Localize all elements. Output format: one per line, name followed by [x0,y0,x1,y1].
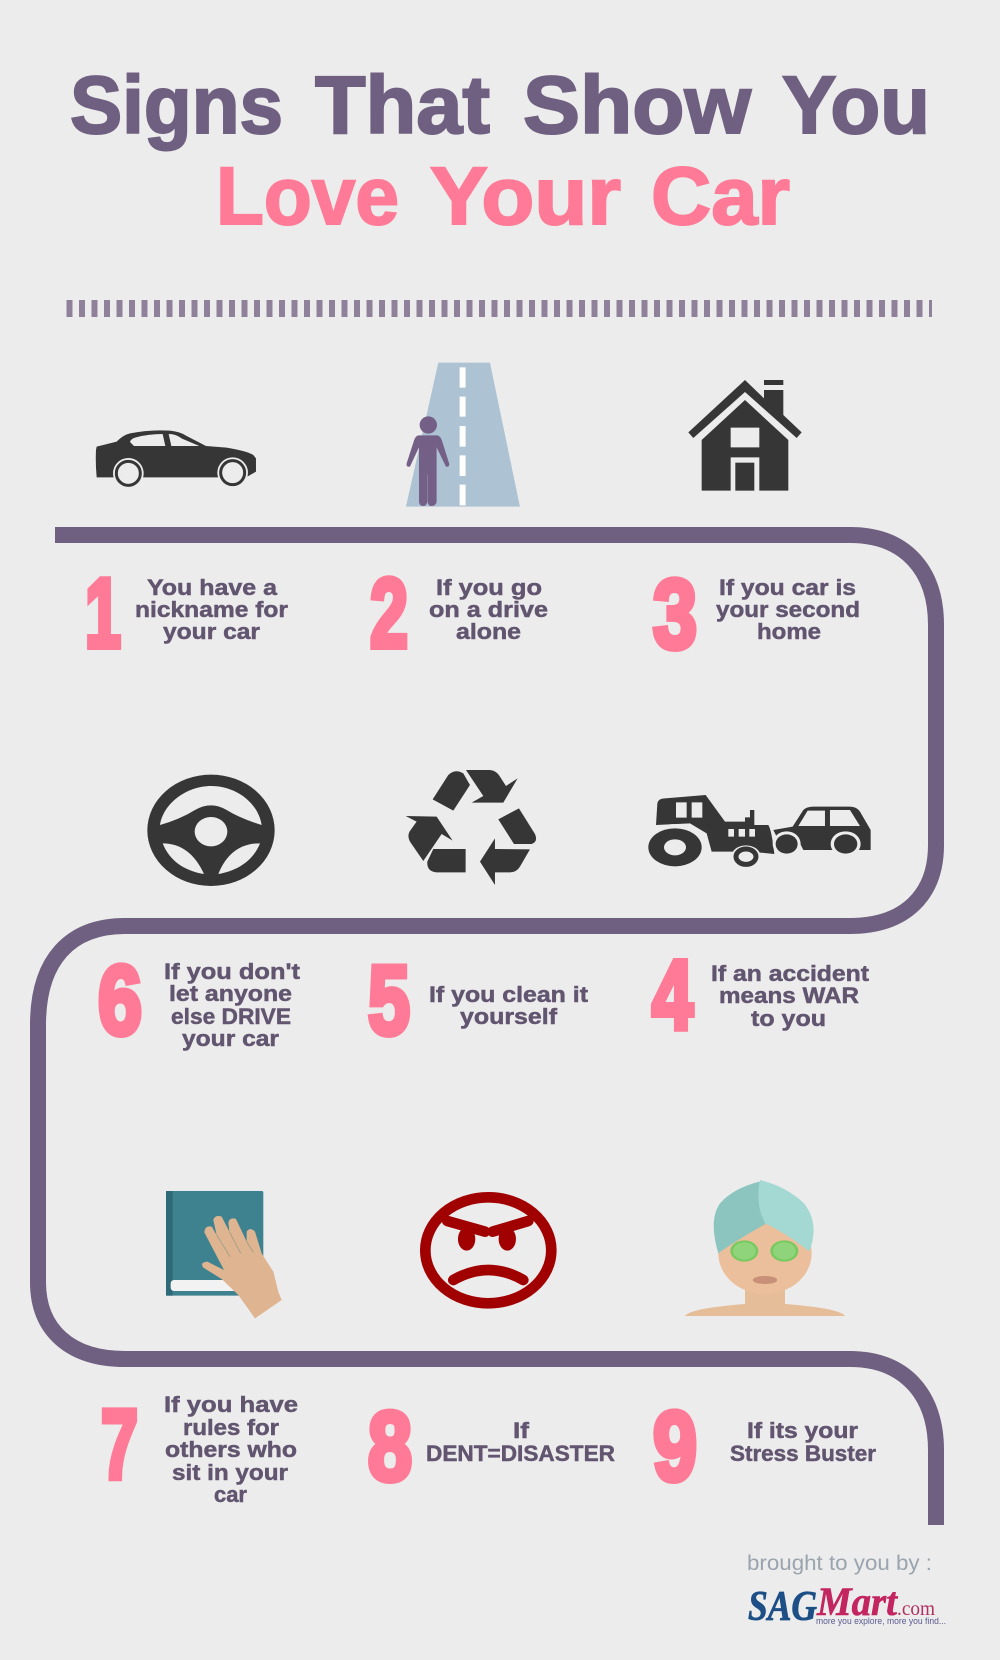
label 7: If you have [164,1392,298,1417]
label 2: If you go [436,575,542,600]
label 8: DENT=DISASTER [426,1441,615,1466]
label 9: Stress Buster [730,1441,876,1466]
label 2: on a drive [429,597,548,622]
icon: hand on book [166,1191,282,1318]
SAGMart logo: SAG [748,1584,817,1630]
label 1: your car [163,619,260,644]
title: Car [651,151,790,242]
item 8 [368,1391,615,1501]
number 2: 2 [370,558,408,668]
item 5 [368,945,589,1055]
label 3 [716,575,860,644]
title: That [315,60,490,151]
label 9: If its your [747,1418,858,1443]
label 6: If you don't [164,959,301,984]
label 7: car [214,1482,247,1507]
label 7 [164,1392,298,1507]
label 7: others who [165,1437,297,1462]
label 2 [429,575,548,644]
label 9 [730,1418,876,1466]
icon: steering wheel [147,775,275,886]
SAGMart logo: more you explore, more you find... [816,1616,946,1626]
title [70,60,930,242]
number 5: 5 [368,945,410,1055]
item 4 [652,940,870,1050]
number 1: 1 [85,558,121,668]
item 9 [653,1391,876,1501]
icon: tractor and car collision [644,795,871,871]
label 6: your car [182,1026,279,1051]
label 3: your second [716,597,860,622]
SAGMart logo: .com [897,1598,935,1620]
label 3: If you car is [719,575,856,600]
item 3 [653,559,860,669]
SAGMart logo [748,1579,946,1630]
label 1 [135,575,288,644]
item 6 [98,945,301,1055]
number 7: 7 [101,1389,138,1499]
label 4: If an accident [711,961,870,986]
label 6 [164,959,301,1051]
title: Love [216,151,399,242]
number 6: 6 [98,945,142,1055]
label 7: sit in your [172,1460,288,1485]
title: Signs [70,60,283,151]
item 7 [101,1389,298,1507]
label 6: let anyone [169,981,292,1006]
icon: road with person [406,363,520,507]
label 5: yourself [460,1004,558,1029]
label 8: If [513,1418,530,1443]
label 1: You have a [147,575,278,600]
item 1 [85,558,288,668]
label 4 [711,961,870,1031]
icon: recycle [406,770,536,885]
number 9: 9 [653,1391,697,1501]
icon: spa face with cucumber eyes [685,1180,845,1316]
winding road path [38,535,936,1525]
label 3: home [757,619,821,644]
item 2 [370,558,548,668]
icon: house [688,380,802,491]
label 8 [426,1418,615,1466]
number 8: 8 [368,1391,412,1501]
label 5 [429,982,589,1029]
brought to you by credit: brought to you by : [747,1552,932,1575]
label 7: rules for [183,1415,279,1440]
number 3: 3 [653,559,697,669]
title: You [782,60,930,151]
label 5: If you clean it [429,982,589,1007]
number 4: 4 [652,940,693,1050]
icon: car [96,430,256,489]
label 6: else DRIVE [171,1004,291,1029]
SAGMart logo: Mart [816,1579,899,1624]
label 2: alone [456,619,521,644]
title: Your [430,151,621,242]
label 4: to you [751,1006,826,1031]
label 1: nickname for [135,597,288,622]
title: Show [523,60,751,151]
icon: angry face [425,1197,551,1303]
label 4: means WAR [719,983,859,1008]
